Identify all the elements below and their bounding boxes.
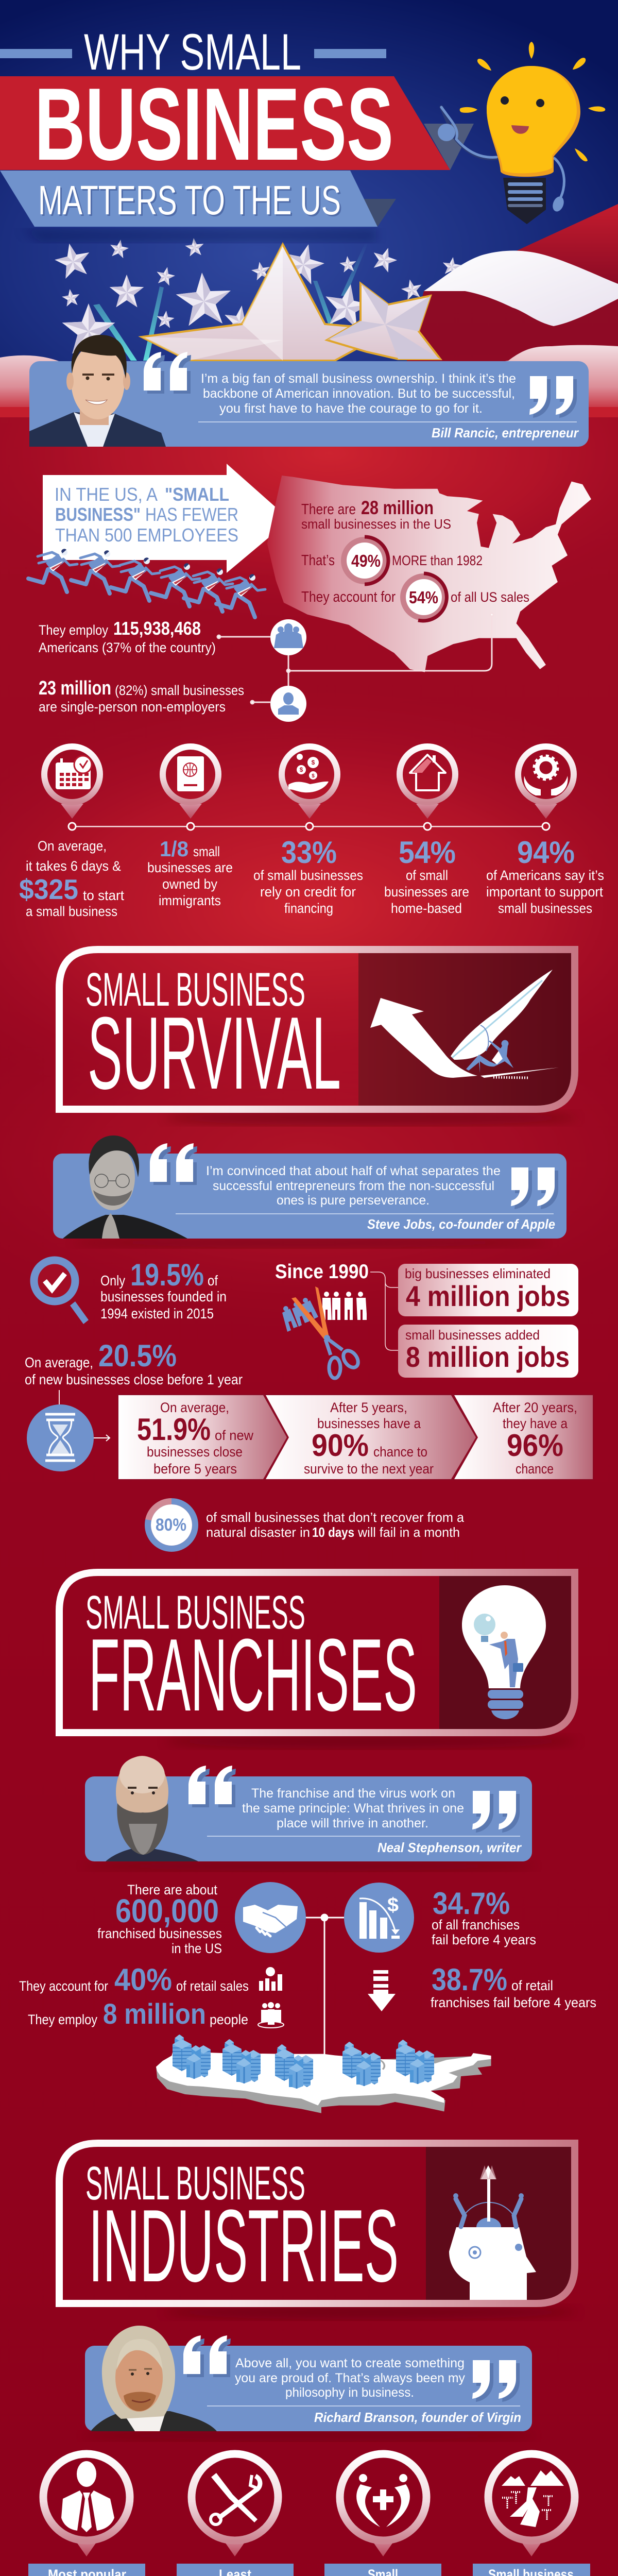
callout: small business definition arrow <box>43 464 290 573</box>
pink cloud waves <box>0 345 618 417</box>
icon: lightbulb with businessman <box>462 1585 546 1719</box>
icon: opening quote mark <box>144 352 191 394</box>
text: employ stat: Americans (37% of the country) <box>39 640 216 655</box>
stat: 20.5 percent <box>25 1338 243 1387</box>
icon: magnifier <box>34 1260 89 1324</box>
caption: home-based: 54% <box>399 835 456 870</box>
heading: small business: SMALL BUSINESS <box>85 1586 305 1639</box>
icon: hands and gear <box>524 756 568 795</box>
icon: house <box>410 755 445 790</box>
heading: survival: SURVIVAL <box>88 996 341 1111</box>
quote text: place will thrive in another. <box>277 1816 428 1831</box>
caption: start-up cost: $325 <box>19 873 78 905</box>
text: employ stat: 115,938,468 <box>113 618 201 639</box>
title bar left <box>0 49 72 58</box>
icon: hand with coins: $ <box>300 766 303 773</box>
stat: 19.5 percent with magnifier icon <box>34 1258 227 1324</box>
red banner fold <box>424 124 474 170</box>
card: big businesses eliminated: 4 million jobs <box>406 1280 570 1312</box>
chevron text: 96 percent: they have a <box>503 1416 568 1431</box>
icon: windsurfer on rising arrow <box>370 970 559 1078</box>
quote text: I’m convinced that about half of what separates the <box>206 1164 501 1178</box>
stat: 40 percent retail: of retail sales <box>176 1978 249 1994</box>
mouth <box>511 125 529 134</box>
caption: start-up cost: to start <box>83 888 124 903</box>
blue banner shadow <box>21 229 376 242</box>
icon: closing quote mark <box>472 2360 520 2402</box>
panel: industries section heading <box>59 2143 577 2319</box>
heading: small business: SMALL BUSINESS <box>85 2157 305 2210</box>
chevron text: 90 percent: After 5 years, <box>330 1400 407 1415</box>
icon: people group <box>258 2002 284 2028</box>
panel: least popular industries <box>177 2454 294 2576</box>
waving flag <box>407 204 618 376</box>
callout: small business definition arrow: "SMALL <box>165 484 229 505</box>
chevron text: 90 percent: businesses have a <box>317 1416 421 1431</box>
stat: 34.7 percent: fail before 4 years <box>432 1932 536 1947</box>
stat: 38.7 percent: franchises fail before 4 years <box>431 1995 596 2010</box>
stat: since 1990 jobs <box>275 1261 578 1378</box>
quote text: the same principle: What thrives in one <box>242 1801 464 1816</box>
stat: 80 percent donut: will fail in a month <box>357 1524 460 1540</box>
stat: 40 percent retail <box>19 1962 282 1997</box>
stat: 19.5 percent with magnifier icon: businesses founded in <box>100 1289 227 1304</box>
header hero panel <box>0 0 618 417</box>
portrait: Bill Rancic <box>29 335 166 447</box>
quote text: The franchise and the virus work on <box>251 1786 455 1801</box>
map shape <box>267 476 591 672</box>
pin: start-up cost <box>44 747 100 819</box>
icon: declining bars with dollar: $ <box>387 1894 399 1916</box>
pin with landscape icon <box>488 2454 575 2556</box>
stat: 8 million employees: They employ <box>28 2012 97 2027</box>
icon: declining bars with dollar <box>344 1883 414 1953</box>
stat: 80 percent donut: 80% <box>156 1515 186 1535</box>
connector lines <box>217 613 493 704</box>
icon: calendar and clock <box>56 756 92 789</box>
quote text: I’m a big fan of small business ownership. I think it’s the <box>201 371 516 386</box>
stars <box>52 237 462 354</box>
chevron text: 96 percent: 96% <box>507 1428 563 1463</box>
light beams <box>93 243 368 361</box>
illustration: running business people <box>28 549 265 617</box>
card: big businesses eliminated <box>398 1264 578 1316</box>
stat: 19.5 percent with magnifier icon: Only <box>100 1273 125 1289</box>
panel: quote Bill Rancic <box>29 335 589 447</box>
pin with healthcare heart icon <box>340 2454 426 2556</box>
panel: most employees industry <box>324 2454 441 2576</box>
caption: home-based <box>384 835 469 916</box>
card description <box>324 2564 441 2576</box>
card: small businesses added: small businesses added <box>405 1327 540 1343</box>
text: employ stat: They employ <box>39 622 108 638</box>
text: non-employers stat <box>39 677 244 715</box>
quote text: you are proud of. That’s always been my <box>235 2371 465 2385</box>
title line shadow: MATTERS TO THE US <box>40 179 342 225</box>
icon: downward arrow <box>368 1970 396 2011</box>
stat: 34.7 percent: of all franchises <box>432 1917 520 1933</box>
stat: since 1990 jobs: Since 1990 <box>275 1261 369 1283</box>
chevron text: 96 percent <box>493 1400 577 1477</box>
stat: 49 percent donut: 49% <box>351 551 381 570</box>
stat: 54 percent donut: 54% <box>409 588 438 607</box>
illustration: 3D US map with office buildings <box>156 2035 491 2113</box>
stat: 40 percent retail: They account for <box>19 1978 108 1994</box>
stat: 28 million: 28 million <box>361 497 434 518</box>
stat: 80 percent donut: natural disaster in <box>206 1524 310 1540</box>
stat: 34.7 percent <box>432 1886 536 1947</box>
caption: immigrants: small <box>193 844 220 859</box>
chevron text: 90 percent: 90% <box>312 1428 369 1463</box>
stat: 20.5 percent: On average, <box>25 1354 93 1370</box>
stat: 8 million employees: people <box>210 2012 248 2027</box>
pin with tools icon <box>192 2454 278 2556</box>
stat: 600,000 franchises: 600,000 <box>115 1892 219 1929</box>
caption: support: of Americans say it’s <box>486 868 604 883</box>
icon: smiling lightbulb mascot <box>438 42 605 224</box>
stat: 28 million <box>301 497 451 532</box>
chevron text: 51.9 percent: of new <box>215 1428 253 1443</box>
franchise connectors <box>305 1914 344 2054</box>
card: small businesses added: 8 million jobs <box>406 1341 570 1373</box>
icon: opening quote mark <box>183 2335 231 2377</box>
stat: 19.5 percent with magnifier icon: of <box>208 1273 218 1289</box>
screw base <box>503 178 546 224</box>
stat: 19.5 percent with magnifier icon: 1994 existed in 2015 <box>100 1306 214 1321</box>
quote card <box>29 361 589 447</box>
eyes <box>501 96 509 105</box>
caption: home-based: home-based <box>391 901 462 916</box>
stat: 49 percent donut: That’s <box>301 552 335 569</box>
chevron text: 51.9 percent: before 5 years <box>153 1461 237 1477</box>
caption: credit: financing <box>284 901 333 916</box>
stat: 28 million: There are <box>301 501 356 518</box>
heading: small business: SMALL BUSINESS <box>85 963 305 1016</box>
caption: credit: of small businesses <box>253 868 363 883</box>
portrait: Steve Jobs <box>63 1136 187 1239</box>
quote attribution: Steve Jobs, co-founder of Apple <box>367 1216 555 1232</box>
icon: opening quote mark <box>150 1143 197 1185</box>
title line: matters to the us: MATTERS TO THE US <box>38 177 341 223</box>
caption: support: important to support <box>486 884 603 900</box>
caption: immigrants: 1/8 <box>160 837 188 861</box>
stat: 38.7 percent: of retail <box>511 1978 553 1993</box>
icon: opening quote mark <box>188 1766 236 1807</box>
quote attribution: Richard Branson, founder of Virgin <box>314 2410 521 2425</box>
stat: 28 million: small businesses in the US <box>301 516 451 532</box>
callout: small business definition arrow: BUSINESS" <box>55 504 141 525</box>
text: non-employers stat: (82%) small businesses <box>115 683 244 698</box>
stat: 54 percent donut: They account for <box>301 589 396 605</box>
icon: scissors and people <box>282 1286 367 1378</box>
chevron text: 51.9 percent: 51.9% <box>137 1412 211 1447</box>
chevron text: 96 percent: After 20 years, <box>493 1400 577 1415</box>
caption: immigrants: immigrants <box>159 893 221 908</box>
panel: quote Richard Branson <box>82 2326 536 2441</box>
panel: survival section heading <box>59 950 577 1125</box>
portrait: Richard Branson <box>91 2326 217 2431</box>
caption: start-up cost <box>19 838 124 919</box>
title bar right <box>314 49 386 58</box>
caption: credit <box>253 835 363 916</box>
stat: 600,000 franchises: in the US <box>171 1941 222 1956</box>
caption: start-up cost: a small business <box>26 904 117 919</box>
text: non-employers stat: are single-person non-employers <box>39 699 226 715</box>
caption: immigrants: owned by <box>162 876 217 892</box>
quote text <box>201 371 516 416</box>
caption: credit: rely on credit for <box>260 884 356 900</box>
quote attribution: Bill Rancic, entrepreneur <box>432 425 579 440</box>
blue banner fold <box>362 199 396 227</box>
icon: closing quote mark <box>472 1791 520 1833</box>
callout: small business definition arrow: HAS FEWER <box>145 504 238 525</box>
caption: support: small businesses <box>498 901 592 916</box>
title <box>0 23 474 242</box>
title line: why small: WHY SMALL <box>84 23 301 80</box>
caption: home-based: of small <box>406 868 448 883</box>
chevron text: 90 percent: chance to <box>373 1444 427 1460</box>
caption: immigrants <box>147 837 233 908</box>
stat: 80 percent donut <box>148 1501 465 1549</box>
chevron text: 51.9 percent: businesses close <box>147 1444 243 1460</box>
quote text <box>235 2356 465 2400</box>
quote text: philosophy in business. <box>285 2385 414 2400</box>
right arm <box>554 158 564 200</box>
icon: hand with coins <box>288 754 329 792</box>
icon: hand with coins: $ <box>312 759 315 766</box>
quote text: ones is pure perseverance. <box>277 1193 430 1208</box>
chevron text: 90 percent <box>304 1400 434 1477</box>
stat: 34.7 percent: 34.7% <box>433 1886 510 1921</box>
card: big businesses eliminated: big businesses eliminated <box>405 1266 551 1281</box>
pin captions <box>19 835 604 919</box>
stat: 80 percent donut: 10 days <box>312 1524 354 1540</box>
text: employ stat <box>39 618 216 655</box>
stat: 19.5 percent with magnifier icon: 19.5% <box>130 1258 204 1292</box>
panel: quote Steve Jobs <box>53 1136 566 1248</box>
stat: 38.7 percent <box>431 1962 596 2010</box>
callout: small business definition arrow: IN THE US, A <box>55 484 158 505</box>
stat: 38.7 percent: 38.7% <box>432 1962 507 1997</box>
panel: fewest employees industry <box>473 2454 590 2576</box>
icon: passport <box>177 756 204 791</box>
panel: quote Neal Stephenson <box>82 1756 536 1871</box>
bulb glass <box>487 66 580 177</box>
quote text: Above all, you want to create something <box>235 2356 465 2370</box>
caption: start-up cost: On average, <box>38 838 107 854</box>
caption: start-up cost: it takes 6 days & <box>26 858 121 874</box>
caption: immigrants: businesses are <box>147 860 233 875</box>
title line: business: BUSINESS <box>35 67 393 182</box>
caption: support: 94% <box>517 835 575 870</box>
timeline <box>68 823 550 830</box>
stat: 600,000 franchises: There are about <box>127 1882 217 1897</box>
US map with statistics <box>267 476 591 672</box>
stat: 8 million employees <box>28 1997 284 2030</box>
panel: most popular industries <box>28 2454 145 2576</box>
card description <box>28 2564 145 2576</box>
stat: 54 percent donut <box>301 573 529 621</box>
rays <box>460 42 605 161</box>
icon: head with rising arrow <box>449 2165 536 2300</box>
stat: 49 percent donut <box>301 537 483 584</box>
left arm <box>441 107 496 158</box>
chevron text: 90 percent: survive to the next year <box>304 1461 434 1477</box>
card description <box>473 2564 590 2576</box>
quote text <box>206 1164 501 1208</box>
panel: franchises section heading <box>59 1572 577 1749</box>
red banner <box>0 76 450 170</box>
icon: sales chart <box>259 1967 282 1991</box>
stat: 600,000 franchises: franchised businesses <box>97 1926 222 1941</box>
pin: home-based <box>400 747 455 819</box>
caption: home-based: businesses are <box>384 884 469 900</box>
quote attribution: Neal Stephenson, writer <box>377 1840 522 1855</box>
icon: hourglass <box>27 1390 110 1471</box>
chevron text: 51.9 percent <box>137 1400 253 1477</box>
icon: closing quote mark <box>529 376 577 418</box>
pin: credit financing <box>282 747 337 819</box>
stat: 54 percent donut: of all US sales <box>451 589 529 605</box>
caption: support <box>486 835 604 916</box>
stat: 20.5 percent: of new businesses close before 1 year <box>25 1371 243 1387</box>
pin: immigrants <box>163 747 218 819</box>
chevron text: 51.9 percent: On average, <box>160 1400 229 1415</box>
pin: support <box>518 747 574 819</box>
icon: hand with coins: $ <box>312 773 315 779</box>
caption: credit: 33% <box>281 835 337 870</box>
text: non-employers stat: 23 million <box>39 677 111 699</box>
icon: single person <box>270 686 306 722</box>
chevron text: 96 percent: chance <box>516 1461 554 1477</box>
stat: 20.5 percent: 20.5% <box>98 1338 177 1373</box>
stat: 49 percent donut: MORE than 1982 <box>392 553 483 568</box>
quote text <box>242 1786 464 1831</box>
icon: closing quote mark <box>511 1167 558 1209</box>
quote text: backbone of American innovation. But to be successful, <box>203 386 515 401</box>
icon: handshake <box>235 1882 306 1953</box>
stat: 600,000 franchises <box>97 1882 222 1956</box>
blue banner <box>0 171 377 227</box>
portrait: Neal Stephenson <box>106 1756 198 1861</box>
callout: small business definition arrow: THAN 500 EMPLOYEES <box>55 524 238 546</box>
large gold-edged star <box>142 244 440 361</box>
stat: 80 percent donut: of small businesses that don’t recover from a <box>206 1510 465 1525</box>
quote text: successful entrepreneurs from the non-successful <box>213 1179 494 1193</box>
stat: 40 percent retail: 40% <box>114 1962 172 1997</box>
pin with businessman icon <box>43 2454 130 2556</box>
card description <box>177 2564 294 2576</box>
card: small businesses added <box>398 1325 578 1378</box>
icon: group of employees <box>270 619 306 655</box>
quote text: you first have to have the courage to go for it. <box>219 401 483 416</box>
panel: survival rate chevrons <box>117 1394 594 1480</box>
stat: 8 million employees: 8 million <box>103 1997 206 2030</box>
